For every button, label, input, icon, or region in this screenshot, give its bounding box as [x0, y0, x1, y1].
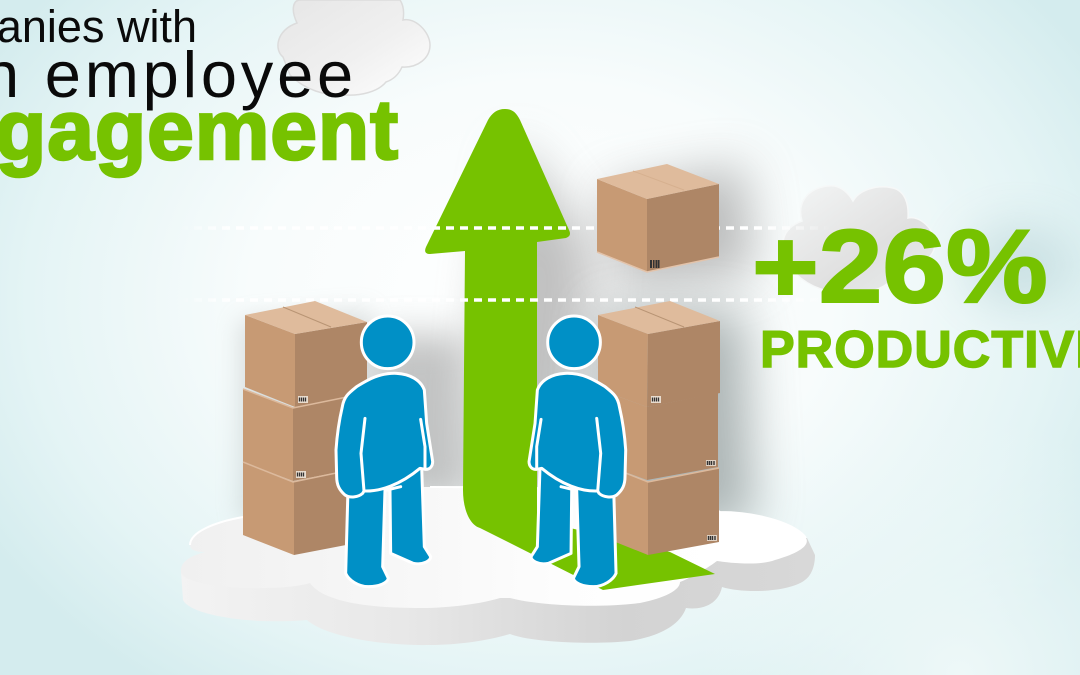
right middle box — [598, 389, 718, 480]
statistic value: +26% — [752, 209, 1048, 325]
legs — [531, 467, 616, 587]
person: left — [336, 316, 433, 587]
platform rim highlight — [190, 487, 806, 545]
platform side — [181, 520, 815, 645]
cloud: right behind number — [783, 186, 935, 293]
soft shadows behind objects — [240, 140, 1080, 675]
barcode — [706, 460, 716, 466]
barcode — [651, 396, 661, 403]
person: right — [529, 316, 626, 587]
right bottom box — [598, 462, 719, 555]
floating box — [597, 164, 719, 272]
right top box — [598, 301, 720, 407]
statistic — [752, 209, 1080, 379]
right box stack — [598, 301, 720, 555]
barcode — [707, 535, 717, 541]
head — [361, 316, 414, 369]
cloud platform — [181, 487, 815, 645]
head — [548, 316, 600, 369]
upward green arrow — [425, 109, 715, 590]
left middle box — [243, 389, 370, 482]
barcode — [296, 471, 306, 478]
clothing lines — [361, 418, 425, 491]
legs — [346, 467, 431, 587]
barcode — [298, 396, 308, 403]
dashed level lines — [180, 228, 830, 300]
torso and arms — [336, 373, 433, 497]
cloud: top left — [278, 0, 430, 95]
heading — [0, 1, 399, 177]
left box stack — [243, 301, 372, 555]
left bottom box — [243, 462, 372, 555]
torso and arms — [529, 373, 626, 497]
clothing lines — [537, 418, 601, 491]
left top box — [243, 301, 367, 408]
platform top surface — [181, 487, 807, 608]
barcode — [650, 260, 660, 268]
